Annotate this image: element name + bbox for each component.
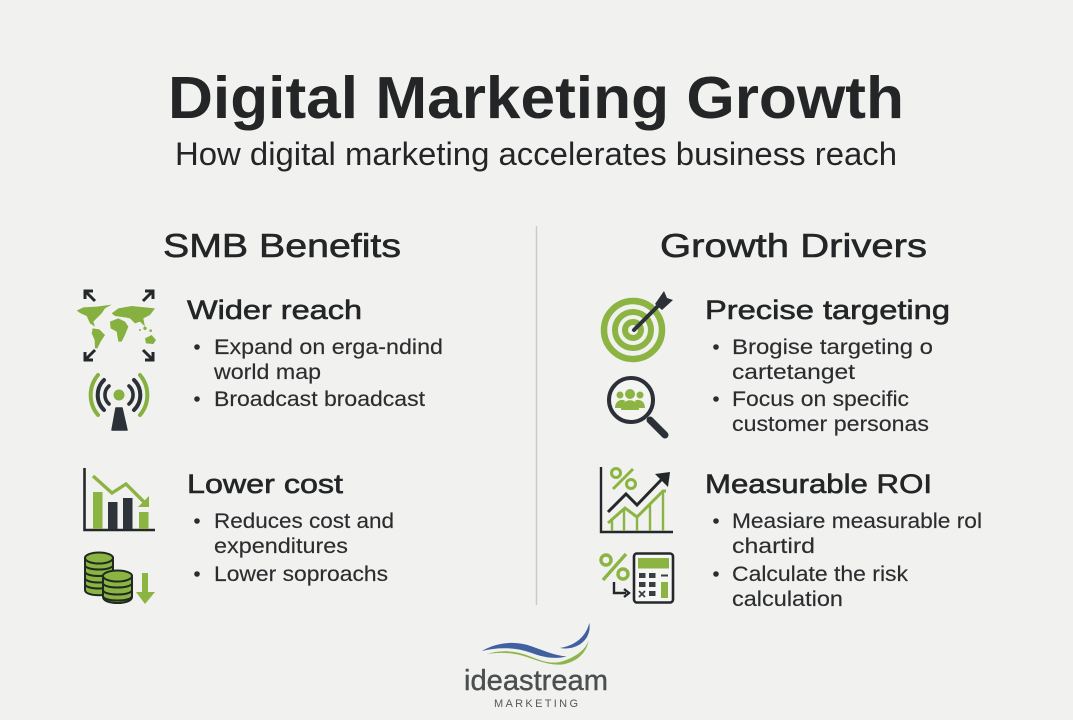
icon: ROI growth chart (601, 467, 673, 532)
text block: Lower cost: expenditures (214, 535, 348, 558)
text block: Precise targeting: Precise targeting (705, 295, 950, 325)
text block: Precise targeting (705, 295, 950, 436)
text block: Lower cost: Reduces cost and (214, 510, 394, 533)
panel: SMB Benefits (77, 227, 443, 604)
heading: SMB Benefits: SMB Benefits (163, 227, 401, 264)
text block: Measurable ROI: chartird (732, 535, 815, 558)
icon: target with dart (604, 291, 673, 359)
text block: Wider reach: Expand on erga-ndind (214, 336, 443, 359)
heading: Growth Drivers: Growth Drivers (660, 227, 927, 264)
text block: Measurable ROI: Measurable ROI (705, 469, 932, 499)
logo tagline: MARKETING (494, 698, 578, 710)
logo wordmark: ideastream (464, 665, 608, 697)
text block: Precise targeting: Brogise targeting o (732, 336, 933, 359)
text block: Lower cost: Lower soproachs (214, 563, 388, 586)
title: Digital Marketing Growth (168, 65, 904, 131)
text block: Wider reach (187, 295, 443, 411)
subtitle: How digital marketing accelerates business reach (175, 136, 897, 172)
text block: Wider reach: Broadcast broadcast (214, 388, 425, 411)
logo swoosh (482, 623, 590, 665)
logo: ideastream marketing (464, 623, 608, 710)
icon: broadcast signal (91, 375, 147, 430)
icon: percent and calculator (601, 554, 673, 602)
icon: magnifier over customer group (609, 378, 665, 435)
icon: coin stacks with down arrow (85, 552, 155, 604)
text block: Lower cost: Lower cost (187, 469, 344, 499)
text block: Measurable ROI: calculation (732, 588, 843, 611)
text block: Wider reach: world map (213, 361, 321, 384)
icon: falling cost chart (84, 468, 155, 530)
text block: Measurable ROI (705, 469, 982, 611)
icon: world map with expanding arrows (77, 291, 156, 360)
text block: Measurable ROI: Calculate the risk (732, 563, 909, 586)
text block: Measurable ROI: Measiare measurable rol (732, 510, 982, 533)
text block: Precise targeting: cartetanget (732, 361, 855, 384)
text block: Precise targeting: customer personas (732, 413, 929, 436)
text block: Precise targeting: Focus on specific (732, 388, 909, 411)
panel: Growth Drivers (601, 227, 982, 611)
text block: Lower cost (187, 469, 394, 586)
text block: Wider reach: Wider reach (187, 295, 362, 325)
